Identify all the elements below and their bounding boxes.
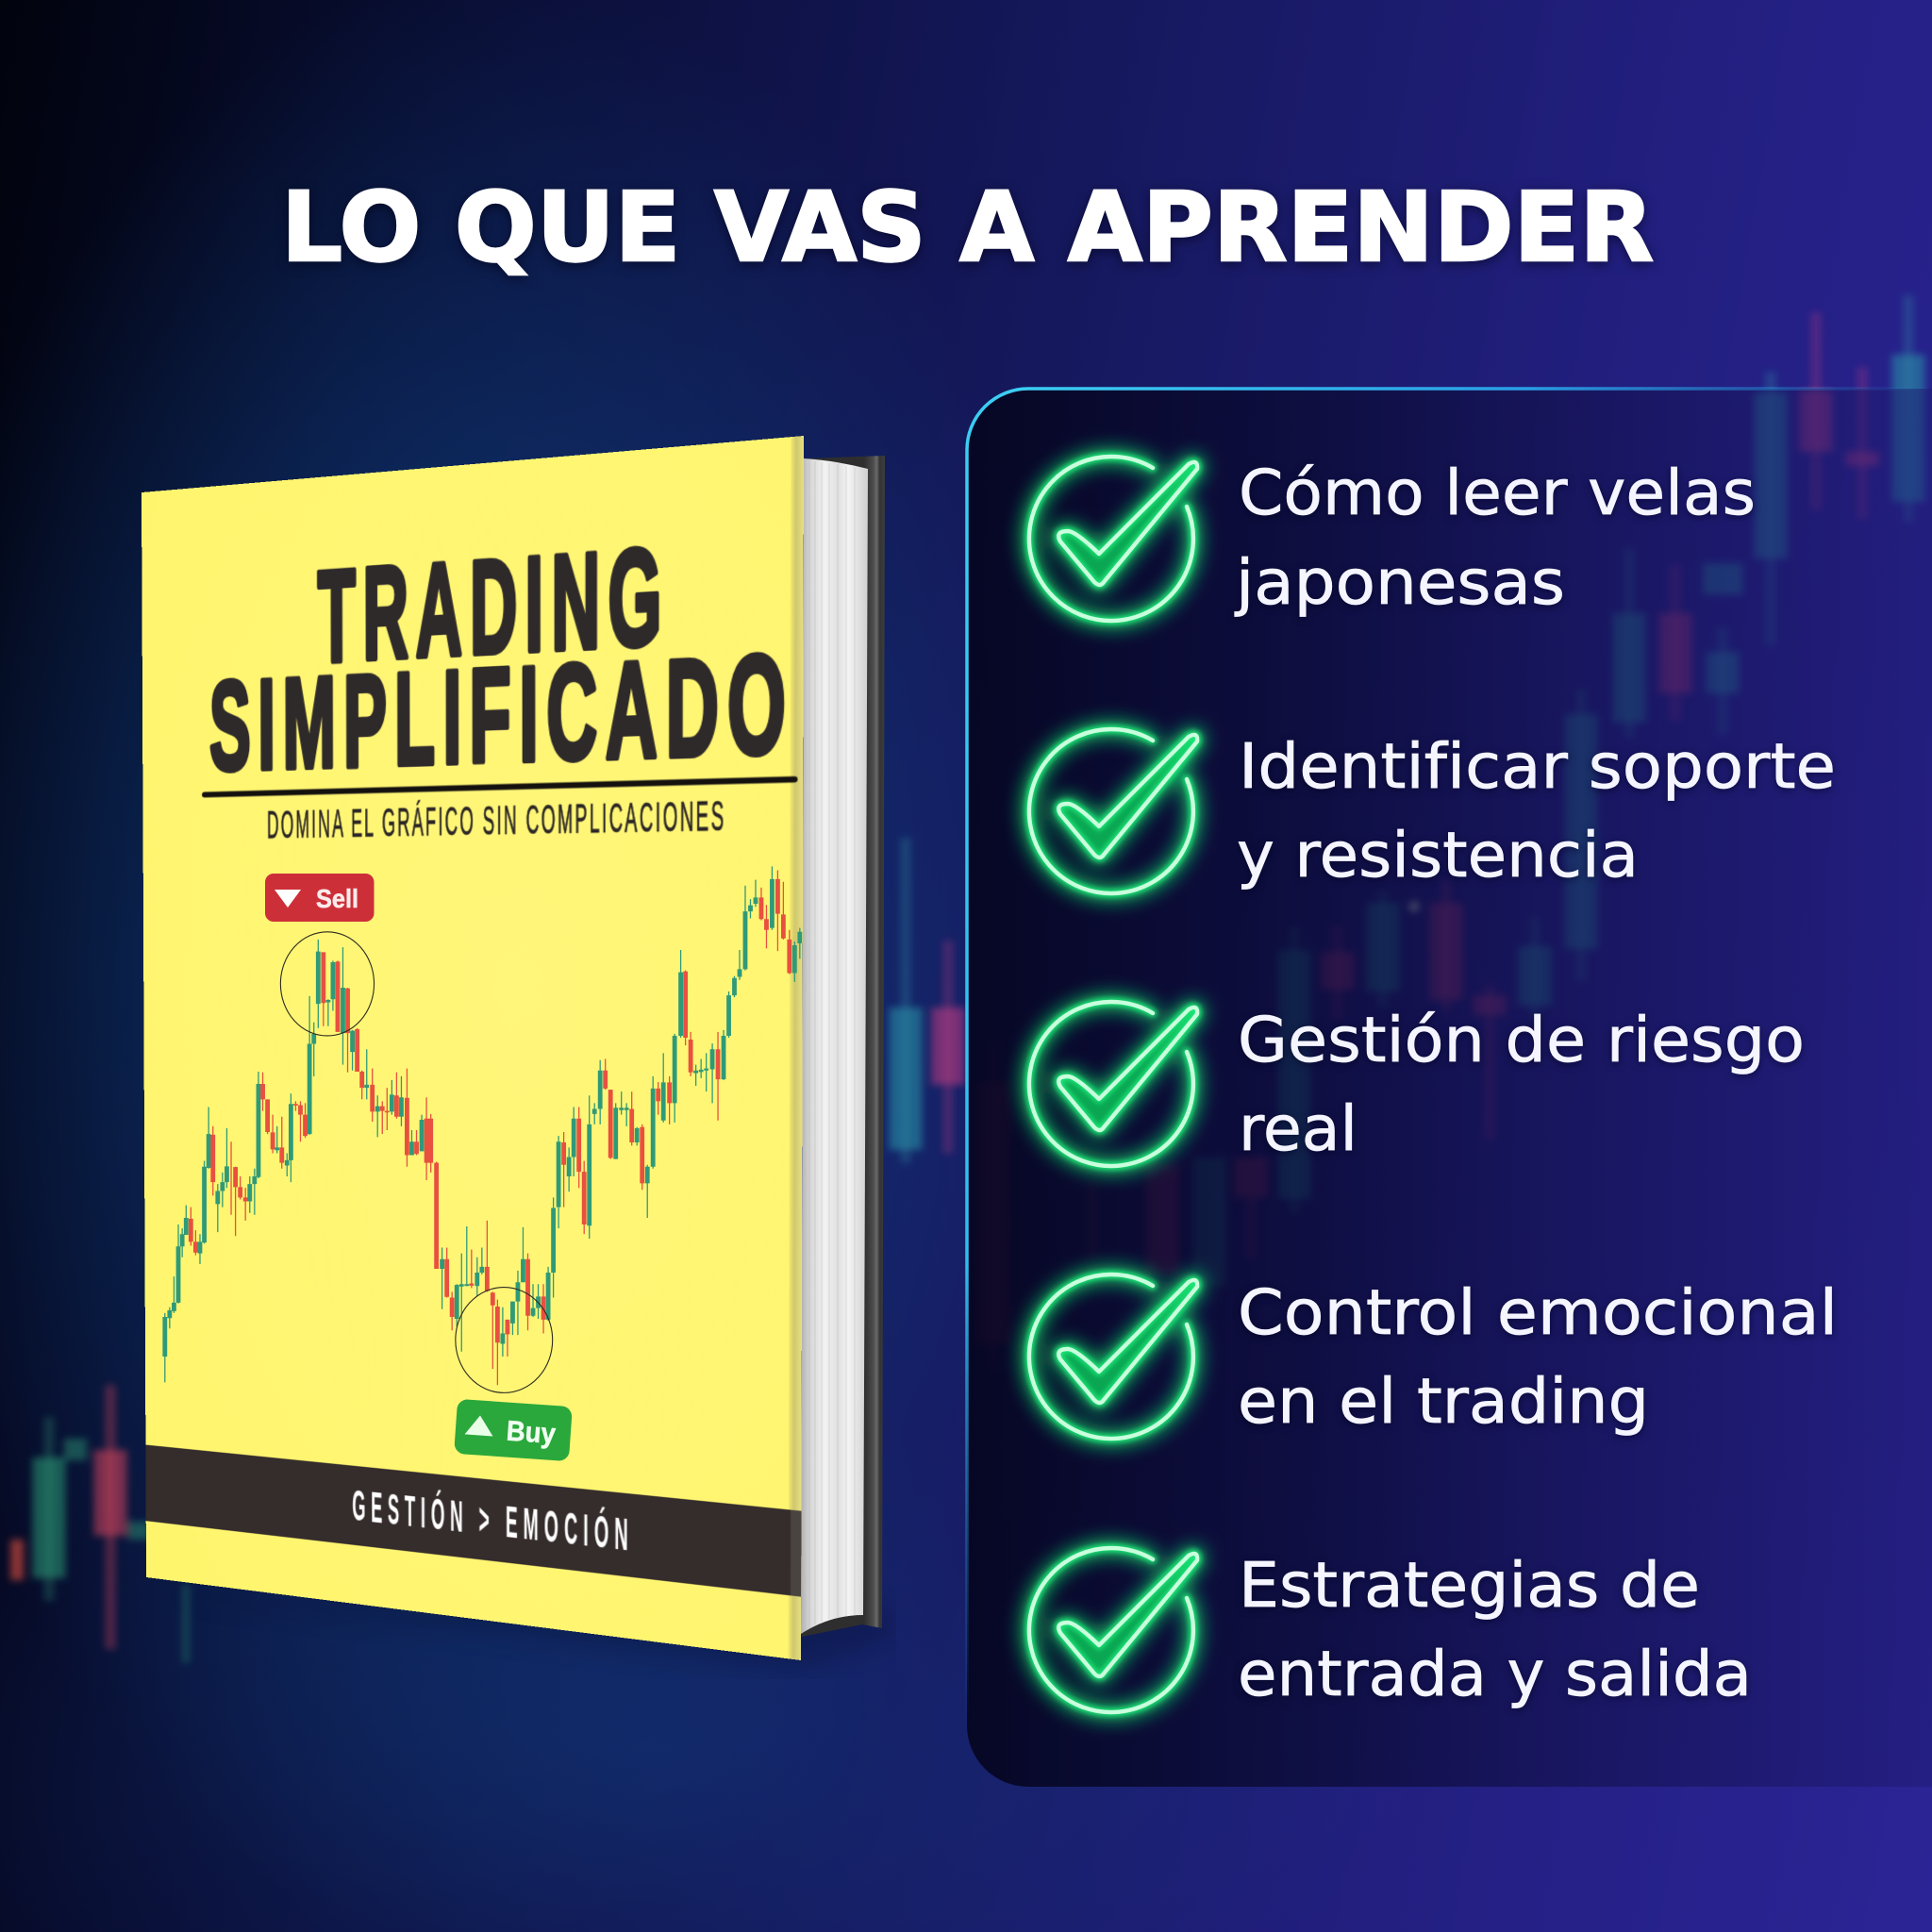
text: item 5: Estrategias de [1239, 1549, 1700, 1622]
text: item 5 [1238, 1549, 1752, 1710]
item 5: check and text [1029, 1548, 1752, 1712]
book pages and back cover [347, 456, 894, 1670]
text: item 1: japonesas [1234, 546, 1565, 619]
text: item 3 [1238, 1004, 1805, 1165]
text: item 2 [1237, 730, 1836, 891]
text: item 5: entrada y salida [1238, 1638, 1752, 1710]
panel: what you will learn [965, 387, 1932, 1787]
text: item 4 [1238, 1276, 1838, 1438]
text: item 3: real [1239, 1092, 1357, 1165]
title: LO QUE VAS A APRENDER [281, 172, 1654, 284]
candlestick chart on cover [162, 866, 802, 1459]
text: item 3: Gestión de riesgo [1238, 1004, 1805, 1076]
icon: neon check 1 [1029, 457, 1197, 621]
text: item 2: Identificar soporte [1239, 730, 1836, 803]
icon: neon check 3 [1029, 1002, 1197, 1166]
sell button: Sell [316, 884, 358, 913]
icon: neon check 5 [1029, 1548, 1197, 1712]
icon: neon check 4 [1029, 1274, 1197, 1439]
item 3: check and text [1029, 1002, 1805, 1166]
buy button: Buy [506, 1416, 557, 1450]
item 4: check and text [1029, 1274, 1838, 1439]
sell button [265, 874, 374, 922]
icon: neon check 2 [1029, 729, 1197, 893]
text: item 1 [1234, 457, 1756, 619]
item 2: check and text [1029, 729, 1836, 893]
item 1: check and text [1029, 457, 1756, 621]
cover rule [202, 776, 798, 797]
book front cover [142, 436, 804, 1660]
book mockup [142, 436, 894, 1670]
text: item 1: Cómo leer velas [1239, 457, 1756, 529]
text: item 2: y resistencia [1237, 819, 1639, 891]
text: item 4: Control emocional [1238, 1276, 1838, 1349]
buy button [455, 1400, 572, 1460]
text: item 4: en el trading [1238, 1365, 1649, 1438]
